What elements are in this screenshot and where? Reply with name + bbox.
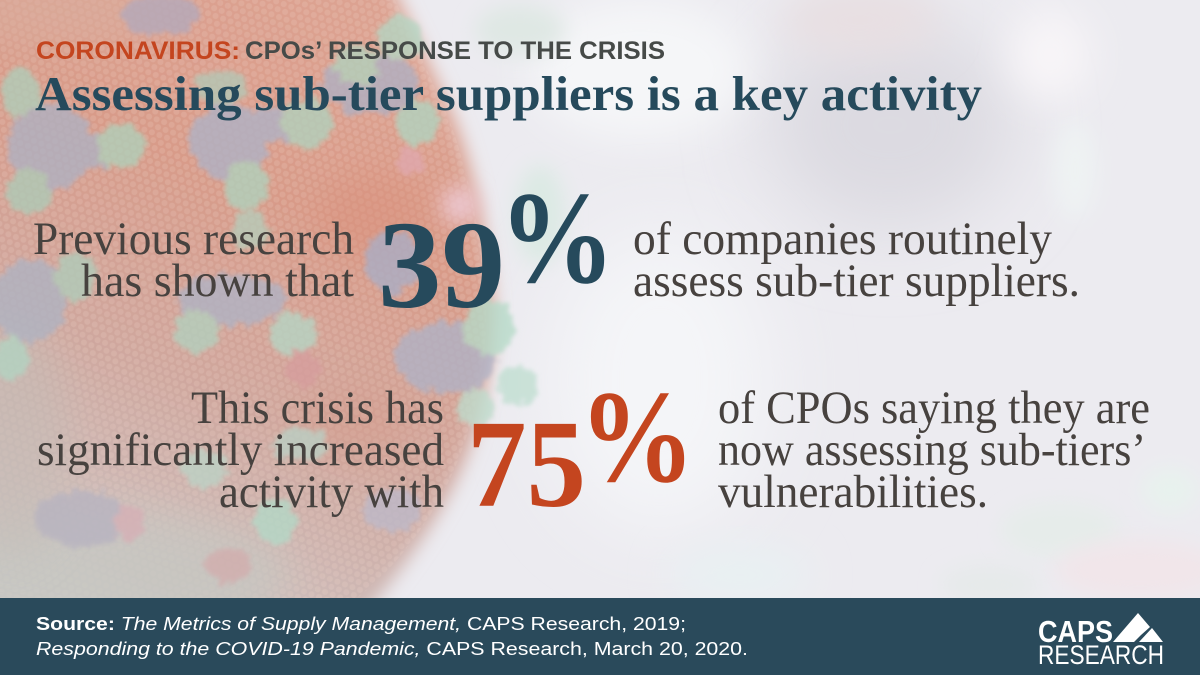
- source note: Responding to the COVID-19 Pandemic, CAPS Research, March 20, 2020.: [36, 638, 748, 659]
- text: companies routinely assess: of companies routinely: [633, 213, 1052, 265]
- footer bar: [0, 598, 1200, 675]
- text: previous research: Previous research: [33, 213, 354, 265]
- text: CPOs saying: vulnerabilities.: [718, 466, 988, 518]
- stat: 75%: 75: [467, 396, 586, 534]
- text: previous research: has shown that: [81, 255, 354, 307]
- text: this crisis: [37, 382, 444, 518]
- text: companies routinely assess: [633, 213, 1080, 307]
- text: this crisis: This crisis has: [191, 382, 444, 434]
- title: Assessing sub-tier suppliers is a key activity: [35, 66, 983, 121]
- logo: CAPS Research: [1038, 613, 1164, 670]
- stat: 75%: %: [579, 363, 695, 510]
- eyebrow heading: CPOs’ RESPONSE TO THE CRISIS: [245, 37, 665, 65]
- logo: CAPS Research: CAPS: [1038, 614, 1113, 649]
- icon: mountain: [1113, 613, 1163, 642]
- text: CPOs saying: now assessing sub-tiers’: [718, 424, 1146, 476]
- stat: 39%: %: [499, 164, 615, 311]
- logo: CAPS Research: RESEARCH: [1038, 640, 1164, 670]
- text: CPOs saying: [718, 382, 1150, 518]
- source note: Source: The Metrics of Supply Management, CAPS Research, 2019;: [36, 613, 686, 634]
- text: CPOs saying: of CPOs saying they are: [718, 382, 1150, 434]
- eyebrow heading: CORONAVIRUS:: [36, 37, 240, 65]
- text: this crisis: significantly increased: [37, 424, 444, 476]
- stat: 75%: [467, 363, 695, 534]
- stat: 39%: 39: [378, 197, 505, 335]
- text: this crisis: activity with: [219, 466, 444, 518]
- sphere: [0, 0, 492, 620]
- source note: [36, 613, 748, 659]
- eyebrow heading: [36, 37, 665, 65]
- spike proteins: [0, 0, 538, 582]
- stat: 39%: [378, 164, 615, 335]
- text: previous research: [33, 213, 354, 307]
- text: companies routinely assess: assess sub-tier suppliers.: [633, 255, 1080, 307]
